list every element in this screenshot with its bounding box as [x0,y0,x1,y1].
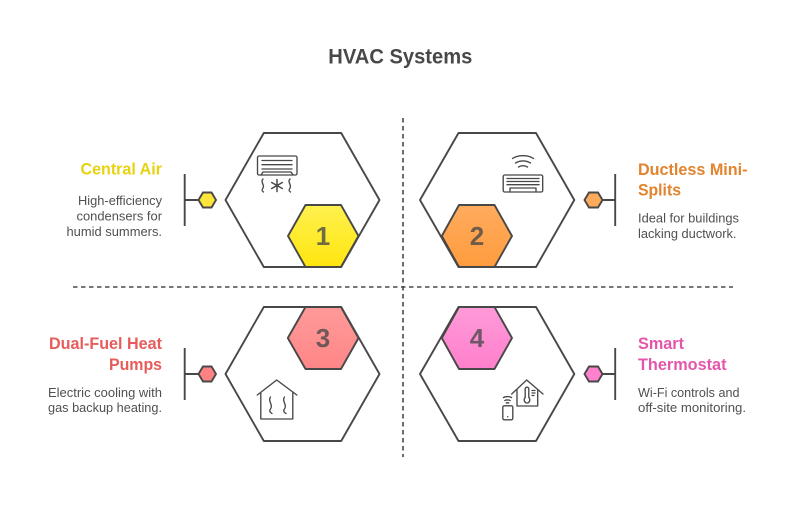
outer hexagon [420,133,574,267]
number hexagon 1 [288,205,358,267]
description: Ductless Mini-Splits: Ideal for buildings [638,210,739,226]
connector with marker hexagon [185,348,216,400]
heading: Smart Thermostat [638,335,727,374]
heading: Central Air: Central Air [80,160,163,178]
heading: Smart Thermostat: Smart [638,335,684,353]
description: Ductless Mini-Splits: lacking ductwork. [638,226,736,241]
outer hexagon [226,307,380,441]
horizontal dashed divider [73,286,733,288]
description: Central Air: condensers for [76,208,163,224]
heading: Dual-Fuel Heat Pumps [49,335,162,374]
icon: house with heat waves [257,380,297,419]
title: HVAC Systems [328,46,472,68]
number hexagon 1: 1 [316,221,330,251]
panel: Central Air [66,133,380,267]
icon: wall air conditioner with cold air [258,156,297,192]
description: Central Air: High-efficiency [78,193,162,208]
vertical dashed divider [402,118,404,457]
panel: Smart Thermostat [420,307,746,441]
panel: Dual-Fuel Heat Pumps [48,307,380,441]
connector with marker hexagon [584,174,615,226]
description: Dual-Fuel Heat Pumps [48,385,162,415]
description: Dual-Fuel Heat Pumps: Electric cooling with [48,385,162,400]
description: Smart Thermostat: off-site monitoring. [638,400,746,415]
description: Dual-Fuel Heat Pumps: gas backup heating. [48,400,162,415]
outer hexagon [420,307,574,441]
panel: Ductless Mini-Splits [420,133,748,267]
description: Smart Thermostat: Wi-Fi controls and [638,385,740,400]
heading: Dual-Fuel Heat Pumps: Pumps [109,356,162,374]
description: Central Air: humid summers. [66,224,162,239]
connector with marker hexagon [185,174,216,226]
heading: Ductless Mini-Splits [638,161,748,200]
description: Central Air [66,193,163,239]
heading: Dual-Fuel Heat Pumps: Dual-Fuel Heat [49,335,162,353]
number hexagon 3 [288,307,358,369]
number hexagon 3: 3 [316,323,330,353]
number hexagon 2: 2 [470,221,484,251]
heading: Ductless Mini-Splits: Ductless Mini- [638,161,748,179]
outer hexagon [226,133,380,267]
connector with marker hexagon [584,348,615,400]
icon: smart home thermometer and phone [503,380,543,420]
description: Ductless Mini-Splits [638,210,739,241]
heading: Ductless Mini-Splits: Splits [638,182,681,200]
number hexagon 4 [442,307,512,369]
number hexagon 4: 4 [470,323,485,353]
description: Smart Thermostat [638,385,746,415]
heading: Smart Thermostat: Thermostat [638,356,727,374]
icon: ductless unit with wifi [503,156,543,192]
number hexagon 2 [442,205,512,267]
